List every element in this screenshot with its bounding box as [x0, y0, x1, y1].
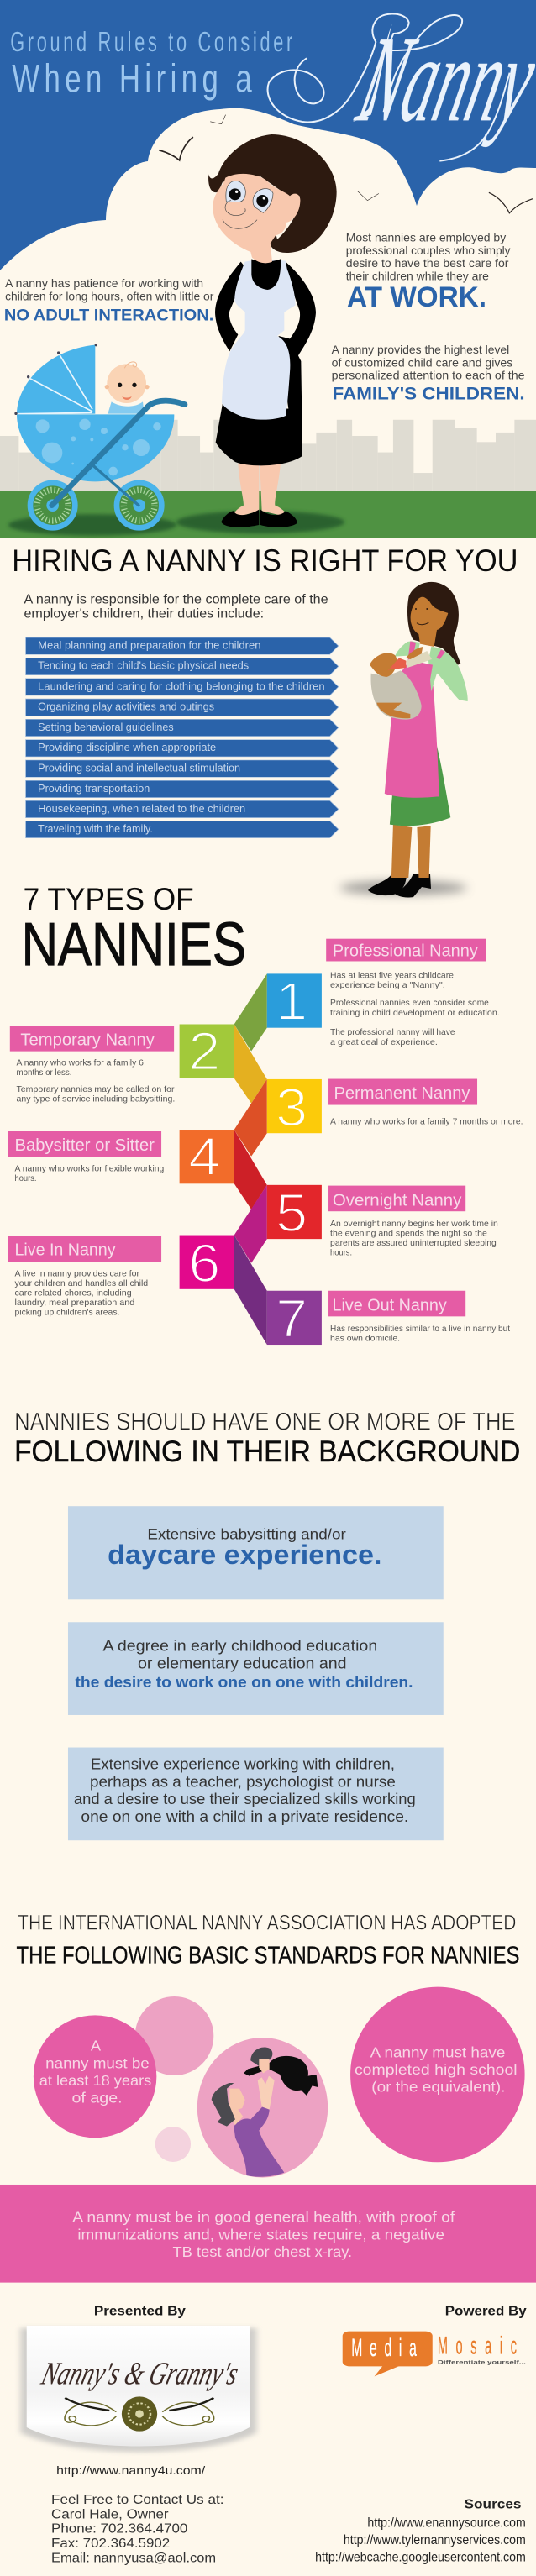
title script word	[268, 11, 536, 161]
type: overnight nanny: Overnight Nanny	[333, 1191, 462, 1209]
panel: background requirements	[14, 1408, 520, 1840]
logo: media mosaic: Media	[351, 2334, 424, 2362]
bubble: age requirement: A	[91, 2038, 102, 2054]
band: health requirement: A nanny must be in good general health, with proof of	[72, 2209, 455, 2226]
box: degree: A degree in early childhood education	[102, 1638, 377, 1655]
website: http://www.nanny4u.com/	[56, 2464, 206, 2478]
duties list: Providing social and intellectual stimulation	[38, 763, 240, 774]
birds	[159, 115, 533, 213]
type: live out nanny: Has responsibilities similar to a live in nanny but	[330, 1324, 510, 1334]
type: temporary nanny: A nanny who works for a family 6	[17, 1058, 144, 1068]
band: health requirement: TB test and/or chest x-ray.	[172, 2244, 352, 2260]
type: babysitter: Babysitter or Sitter	[14, 1136, 155, 1155]
type: babysitter	[8, 1131, 164, 1183]
type: professional nanny: Has at least five years childcare	[330, 971, 454, 980]
panel: hiring a nanny is right for you	[12, 543, 518, 898]
heading	[14, 1408, 520, 1468]
band: health requirement: immunizations and, where states require, a negative	[77, 2227, 444, 2243]
type: live in nanny: Live In Nanny	[14, 1241, 116, 1259]
title line two: When Hiring a	[12, 56, 256, 100]
heading: NANNIES	[22, 910, 246, 978]
duties list: Organizing play activities and outings	[38, 701, 214, 713]
nanny head	[208, 134, 337, 263]
legs and dress	[385, 669, 450, 878]
heading	[22, 882, 246, 978]
logo: nanny's and granny's: Nanny's & Granny's	[38, 2356, 242, 2391]
type: temporary nanny: any type of service including babysitting.	[17, 1094, 175, 1104]
text: patience	[4, 276, 214, 324]
type: live in nanny: your children and handles all child	[14, 1278, 148, 1288]
box: extensive experience: and a desire to use their specialized skills working	[74, 1791, 416, 1807]
type: live out nanny	[328, 1291, 510, 1343]
logo: media mosaic	[343, 2332, 526, 2376]
text: family's children: FAMILY'S CHILDREN.	[333, 382, 525, 403]
contact details: Feel Free to Contact Us at:	[51, 2493, 224, 2507]
illustration: nanny	[176, 134, 344, 533]
box: daycare experience: Extensive babysitting and/or	[147, 1525, 346, 1543]
intro text: employer's children, their duties include:	[24, 606, 264, 621]
type: professional nanny: training in child development or education.	[330, 1008, 500, 1018]
cloud	[0, 108, 536, 504]
type: live out nanny: has own domicile.	[330, 1334, 400, 1343]
type: professional nanny: Professional nannies even consider some	[330, 998, 489, 1008]
text: family's children: A nanny provides the highest level	[332, 343, 509, 356]
duties list: Laundering and caring for clothing belonging to the children	[38, 681, 325, 693]
zigzag number chart: 2	[188, 1021, 220, 1082]
panel: basic standards	[0, 1911, 536, 2283]
band: health requirement	[0, 2185, 536, 2283]
presented by label: Presented By	[94, 2303, 186, 2318]
bubble: age requirement: of age.	[71, 2090, 123, 2106]
text: at work	[346, 231, 511, 313]
type: professional nanny	[326, 939, 500, 1047]
bubble: high school: A nanny must have	[370, 2044, 505, 2061]
type: permanent nanny	[328, 1079, 523, 1126]
title line one: Ground Rules to Consider	[10, 27, 296, 58]
skyline	[0, 420, 536, 494]
bubble: age requirement: at least 18 years	[39, 2073, 151, 2089]
text: at work: AT WORK.	[347, 281, 486, 313]
box: degree: the desire to work one on one with children.	[76, 1674, 413, 1691]
box: extensive experience: perhaps as a teacher, psychologist or nurse	[90, 1773, 396, 1790]
type: overnight nanny: the evening and spends the night so the	[330, 1229, 487, 1239]
contact details: Phone: 702.364.4700	[51, 2521, 187, 2536]
bubble: high school: completed high school	[355, 2062, 518, 2078]
nanny body	[176, 259, 344, 533]
zigzag number chart: 4	[188, 1127, 220, 1188]
zigzag number chart: 5	[276, 1183, 307, 1243]
duties list: Setting behavioral guidelines	[38, 721, 174, 734]
panel: footer	[20, 2303, 527, 2565]
type: temporary nanny: Temporary nannies may be called on for	[17, 1084, 175, 1094]
type: live in nanny	[8, 1236, 161, 1317]
zigzag number chart: 6	[188, 1234, 220, 1294]
contact details: Email: nannyusa@aol.com	[51, 2551, 216, 2565]
panel: hero scene	[0, 0, 536, 538]
duties list: Tending to each child's basic physical needs	[38, 660, 249, 672]
text: patience: children for long hours, often with little or	[5, 289, 214, 302]
type: temporary nanny: months or less.	[17, 1068, 71, 1078]
icon: stroller with baby	[8, 344, 185, 536]
type: temporary nanny	[10, 1026, 175, 1104]
panel: 7 types of nannies	[8, 882, 523, 1349]
bubbles decor	[135, 1996, 328, 2178]
type: overnight nanny: parents are assured uninterrupted sleeping	[330, 1238, 497, 1248]
contact details	[51, 2493, 224, 2565]
box: daycare experience	[68, 1506, 444, 1599]
intro text: A nanny is responsible for the complete care of the	[24, 592, 328, 606]
duties list: Providing transportation	[38, 783, 150, 795]
box: daycare experience: daycare experience.	[108, 1540, 382, 1570]
box: extensive experience: Extensive experience working with children,	[91, 1755, 395, 1773]
upper body and baby	[370, 582, 468, 731]
zigzag number chart	[180, 972, 322, 1349]
shadow and shoes	[339, 874, 467, 898]
text: patience: A nanny has patience for working with	[5, 276, 203, 290]
type: permanent nanny: A nanny who works for a family 7 months or more.	[330, 1117, 523, 1126]
type: professional nanny: experience being a "Nanny".	[330, 980, 445, 990]
zigzag number chart: 7	[276, 1289, 307, 1349]
duties list	[26, 637, 339, 838]
duties list: Traveling with the family.	[38, 823, 153, 836]
text: family's children: of customized child care and gives	[332, 356, 512, 370]
bubble: age requirement: nanny must be	[45, 2055, 150, 2072]
contact details: Carol Hale, Owner	[51, 2507, 169, 2521]
heading: FOLLOWING IN THEIR BACKGROUND	[14, 1435, 520, 1468]
type: overnight nanny: hours.	[330, 1248, 352, 1258]
text: at work: their children while they are	[346, 270, 489, 283]
sources: Sources	[465, 2496, 522, 2511]
type: live out nanny: Live Out Nanny	[333, 1296, 448, 1314]
zigzag number chart: 3	[276, 1078, 307, 1138]
text: family's children	[332, 343, 525, 403]
type: live in nanny: care related chores, including	[14, 1288, 132, 1298]
type: temporary nanny: Temporary Nanny	[20, 1031, 155, 1050]
illustration: mother feeding baby	[339, 582, 468, 898]
type: professional nanny: The professional nanny will have	[330, 1027, 455, 1037]
bubble: high school: (or the equivalent).	[371, 2079, 505, 2096]
heading	[17, 1911, 519, 1969]
text: at work: Most nannies are employed by	[346, 231, 506, 244]
type: babysitter: A nanny who works for flexible working	[14, 1164, 164, 1173]
bubble: age requirement	[34, 2015, 156, 2138]
type: overnight nanny	[328, 1186, 498, 1258]
text: at work: desire to have the best care for	[346, 256, 509, 270]
grass	[0, 491, 536, 538]
bubble: high school	[350, 1987, 525, 2162]
type: babysitter: hours.	[14, 1173, 37, 1183]
illustration: mother lifting child	[212, 2047, 318, 2177]
box: degree: or elementary education and	[138, 1655, 347, 1671]
duties list: Housekeeping, when related to the children	[38, 803, 245, 816]
text: family's children: personalized attention to each of the	[332, 369, 525, 382]
heading: 7 TYPES OF	[24, 882, 194, 917]
duties list: Providing discipline when appropriate	[38, 742, 216, 754]
type: live in nanny: picking up children's areas.	[14, 1308, 119, 1317]
intro text	[24, 592, 328, 621]
box: degree	[68, 1622, 444, 1715]
box: extensive experience	[68, 1748, 444, 1840]
duties list: Meal planning and preparation for the children	[38, 640, 260, 652]
logo: media mosaic: Differentiate yourself...	[438, 2358, 526, 2365]
text: at work: professional couples who simply	[346, 244, 511, 257]
contact details: Fax: 702.364.5902	[51, 2537, 170, 2551]
sources	[315, 2496, 526, 2564]
sky	[0, 0, 536, 496]
type: overnight nanny: An overnight nanny begins her work time in	[330, 1219, 498, 1229]
zigzag number chart: 1	[276, 972, 307, 1032]
type: permanent nanny: Permanent Nanny	[334, 1083, 470, 1103]
logo: nanny's and granny's	[20, 2326, 256, 2452]
type: live in nanny: laundry, meal preparation and	[14, 1298, 134, 1308]
box: extensive experience: one on one with a child in a private residence.	[81, 1808, 408, 1825]
text: patience: NO ADULT INTERACTION.	[4, 306, 213, 324]
type: professional nanny: a great deal of experience.	[330, 1037, 438, 1047]
type: professional nanny: Professional Nanny	[333, 942, 479, 961]
type: live in nanny: A live in nanny provides care for	[14, 1269, 139, 1278]
